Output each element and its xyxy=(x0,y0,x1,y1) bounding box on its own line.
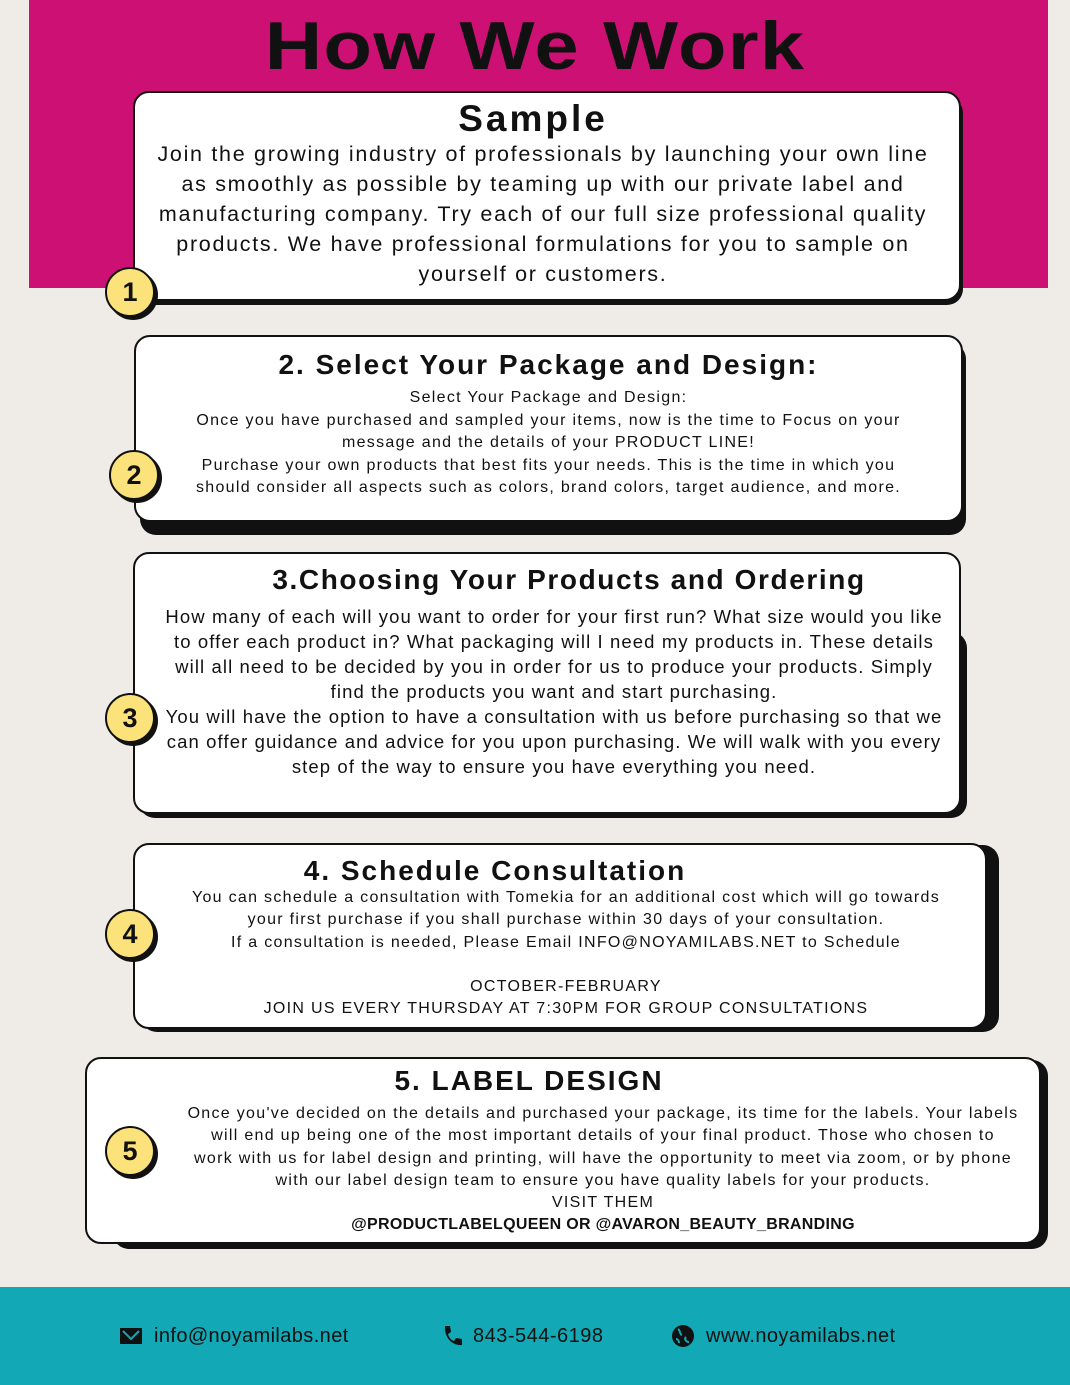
title: How We Work xyxy=(265,8,805,84)
contact: phone: 843-544-6198 xyxy=(473,1325,604,1347)
contact: website: www.noyamilabs.net xyxy=(706,1325,896,1347)
card 3: Choosing Products: to offer each product in? What packaging will I need my products in. These details xyxy=(174,631,934,652)
card 5: Label Design: Once you've decided on the details and purchased your package, its time for the labels. Your labels xyxy=(188,1105,1018,1122)
step 5 badge xyxy=(105,1126,155,1176)
card 4: Schedule Consultation: your first purchase if you shall purchase within 30 days of your consultation. xyxy=(248,911,884,928)
step 3 badge: 3 xyxy=(122,703,138,733)
card 1: Sample: manufacturing company. Try each of our full size professional quality xyxy=(159,202,927,226)
card 4: Schedule Consultation: JOIN US EVERY THURSDAY AT 7:30PM FOR GROUP CONSULTATIONS xyxy=(264,1000,868,1017)
step 2 badge xyxy=(109,450,159,500)
card 2: Select Package: should consider all aspects such as colors, brand colors, target audience, and more. xyxy=(196,479,901,496)
card 1: Sample: as smoothly as possible by teaming up with our private label and xyxy=(181,172,905,196)
card 1: Sample: yourself or customers. xyxy=(419,262,667,286)
card 4: Schedule Consultation: If a consultation is needed, Please Email INFO@NOYAMILABS.NET to Schedule xyxy=(231,934,901,951)
card 1: Sample xyxy=(133,91,961,301)
card 5: Label Design: work with us for label design and printing, will have the opportunity to meet via zoom, or by phone xyxy=(194,1150,1012,1167)
card 3: Choosing Products: find the products you want and start purchasing. xyxy=(331,681,777,702)
card 2: Select Package: Select Your Package and Design: xyxy=(410,389,687,406)
icon: phone xyxy=(444,1326,462,1346)
card 5: Label Design: VISIT THEM xyxy=(552,1194,654,1211)
card 3: Choosing Products: can offer guidance and advice for you upon purchasing. We will walk with you every xyxy=(167,731,941,752)
card 2: Select Package xyxy=(134,335,963,522)
card 2: Select Package: Purchase your own products that best fits your needs. This is the time in which you xyxy=(202,456,895,474)
card 5: Label Design xyxy=(85,1057,1041,1244)
card 5: Label Design: @PRODUCTLABELQUEEN OR @AVARON_BEAUTY_BRANDING xyxy=(351,1216,855,1233)
card 2: Select Package: 2. Select Your Package and Design: xyxy=(278,349,819,380)
contact: email: info@noyamilabs.net xyxy=(154,1325,349,1347)
icon: globe xyxy=(672,1325,694,1347)
card 3: Choosing Products: You will have the option to have a consultation with us before purchasing so that we xyxy=(166,706,942,727)
header band xyxy=(29,0,1048,288)
card 1: Sample: products. We have professional formulations for you to sample on xyxy=(176,232,910,256)
step 3 badge xyxy=(105,693,155,743)
footer xyxy=(0,1287,1070,1385)
card 3: Choosing Products: 3.Choosing Your Products and Ordering xyxy=(272,564,866,595)
card 4: Schedule Consultation: You can schedule a consultation with Tomekia for an additional cost which will go towards xyxy=(192,889,940,906)
card 2: Select Package: Once you have purchased and sampled your items, now is the time to Focus on your xyxy=(196,412,901,428)
card 5: Label Design: with our label design team to ensure you have quality labels for your products. xyxy=(275,1172,930,1189)
card 5: Label Design: will end up being one of the most important details of your final product. Those who chosen to xyxy=(211,1127,995,1144)
card 1: Sample: Join the growing industry of professionals by launching your own line xyxy=(157,142,929,166)
card 4: Schedule Consultation: 4. Schedule Consultation xyxy=(304,855,686,886)
card 1: Sample: Sample xyxy=(458,98,608,139)
step 2 badge: 2 xyxy=(126,460,142,490)
step 1 badge xyxy=(105,267,155,317)
card 3: Choosing Products: will all need to be decided by you in order for us to produce your products. Simply xyxy=(175,656,933,677)
step 5 badge: 5 xyxy=(122,1136,138,1166)
card 4: Schedule Consultation: OCTOBER-FEBRUARY xyxy=(470,978,662,995)
icon: envelope xyxy=(120,1328,142,1344)
step 4 badge xyxy=(105,909,155,959)
card 4: Schedule Consultation xyxy=(133,843,987,1029)
step 1 badge: 1 xyxy=(122,277,138,307)
card 3: Choosing Products xyxy=(133,552,961,814)
card 3: Choosing Products: step of the way to ensure you have everything you need. xyxy=(292,756,816,777)
step 4 badge: 4 xyxy=(122,919,138,949)
card 2: Select Package: message and the details of your PRODUCT LINE! xyxy=(342,434,755,451)
card 5: Label Design: 5. LABEL DESIGN xyxy=(394,1065,664,1096)
card 3: Choosing Products: How many of each will you want to order for your first run? What size would you like xyxy=(165,606,943,627)
